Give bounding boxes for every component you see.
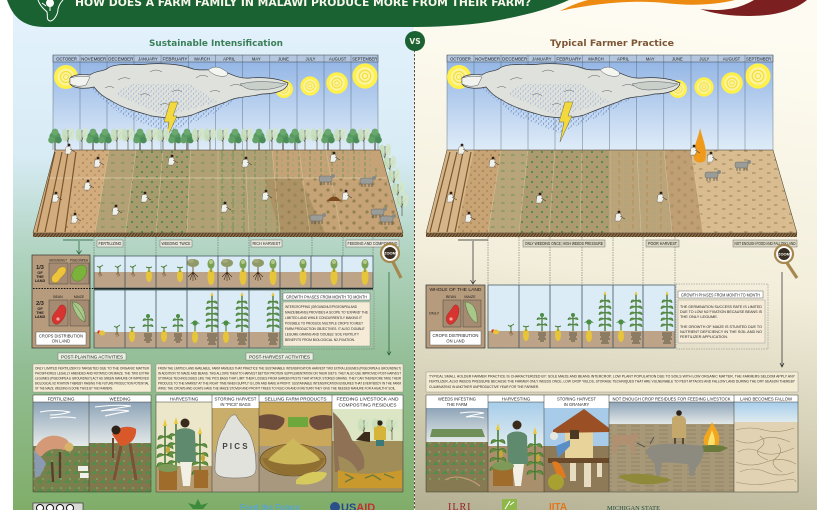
callout: growth phases sustainable: LIMITED LAND WHILE CONCURRENTLY MAKING IT <box>285 315 363 320</box>
callout: growth phases typical: NUTRIENT DEFICIENCY IN THE SOIL AND NO <box>680 329 762 334</box>
icon: zoom magnifier sustainable <box>381 244 401 278</box>
icon: bean <box>49 300 68 326</box>
arrow: zoom to activities sustainable <box>387 272 391 355</box>
panel: crop distribution sustainable <box>32 255 94 348</box>
callout: growth phases sustainable: GROWTH PHASES FROM MONTH TO MONTH <box>286 294 367 299</box>
panel: weeds infesting the farm: THE FARM <box>447 402 468 407</box>
land share labels: 2/3 <box>36 301 44 307</box>
panel: harvesting: HARVESTING <box>170 396 199 402</box>
leaf logo <box>188 499 208 509</box>
text block: post-planting: LEGUMES (PIGEONPEA & GROUNDNUT) ACT AS GREEN MANURE OF IMPROVED <box>35 376 149 380</box>
suns <box>447 63 771 98</box>
storm cloud <box>462 64 680 118</box>
panel: sustainable calendar sky <box>53 55 378 150</box>
plants <box>491 291 673 343</box>
text block: post-harvest: PRODUCE TO THE MARKET AT THE RIGHT TIME WHEN SUPPLY IS LOW AND MAKE A PROFIT. SUSTAINABLE INTENSIFICATION ENSURES THAT EVERYBODY IN THE FARM <box>158 380 401 386</box>
month labels: JUNE <box>278 57 289 62</box>
month labels: AUGUST <box>723 57 741 62</box>
month labels: DECEMBER <box>502 57 527 62</box>
text block: post-planting <box>33 364 151 392</box>
chart: growth phases typical <box>488 285 675 348</box>
panel: weeds infesting the farm: WEEDS INFESTING <box>438 396 476 402</box>
month labels: APRIL <box>223 57 236 62</box>
month labels <box>56 57 377 62</box>
callout: growth phases typical: GROWTH PHASES FROM MONTH TO MONTH <box>681 292 760 297</box>
crop labels: ONLY <box>429 310 440 316</box>
callout: growth phases typical: THE ONLY LEGUME. <box>680 314 718 319</box>
panel: weeding <box>89 395 151 492</box>
background: sustainable side <box>13 0 414 510</box>
bottom row plants <box>97 292 279 344</box>
panel: feeding livestock and composting: FEEDING LIVESTOCK AND <box>336 396 399 402</box>
text block: typical practice <box>426 372 798 392</box>
field: sustainable intensification <box>33 144 403 237</box>
footer logos: left <box>33 499 375 510</box>
icon: zoom magnifier typical <box>775 245 797 278</box>
icon: africa logo <box>38 0 63 21</box>
divider <box>414 50 416 510</box>
activity labels: sustainable: FEEDING AND COMPOSTING <box>348 241 398 246</box>
land share labels: 1/3 <box>36 265 44 271</box>
suns <box>54 63 378 98</box>
rain <box>482 80 642 133</box>
icon: pigeonpea <box>70 263 89 284</box>
month labels: MAY <box>252 57 261 62</box>
crop labels <box>49 258 89 299</box>
callout: growth phases typical: DUE TO LOW N2 FIXATION BECAUSE BEANS IS <box>680 309 762 314</box>
crop labels: GROUNDNUT <box>49 258 67 262</box>
text block: post-harvest: WINS: THE CROWS AND GOATS HAVE THE MAIZE STOVER AND PROFIT TREES TO FEED ON AND IN RETURN THEY GIVE THE NEEDED MANURE FOR A HEALTHY SOIL. <box>158 386 396 390</box>
panel: feeding livestock and composting: COMPOSTING RESIDUES <box>338 402 397 408</box>
field: typical farmer practice <box>426 128 797 237</box>
vs badge <box>405 31 425 51</box>
panel: not enough crop residues: NOT ENOUGH CROP RESIDUES FOR FEEDING LIVESTOCK <box>612 396 731 402</box>
crop labels: BEAN <box>446 295 456 299</box>
land share labels: OF <box>37 307 43 311</box>
activity labels: typical: NOT ENOUGH FOOD AND FALLOW LAND <box>734 241 796 246</box>
month labels: FEBRUARY <box>556 57 582 62</box>
panel: land becomes fallow: LAND BECOMES FALLOW <box>740 396 793 402</box>
land share labels: OF <box>37 271 43 275</box>
callout: growth phases sustainable <box>282 290 374 349</box>
label: post-planting activities <box>58 353 126 360</box>
text block: post-harvest <box>156 364 403 392</box>
arrow: zoom to activities typical <box>780 272 784 367</box>
land share labels <box>35 265 46 319</box>
panel: weeding: WEEDING <box>110 396 131 402</box>
callout: growth phases typical: FERTILIZER APPLICATION. <box>680 334 728 339</box>
month labels: JANUARY <box>138 57 158 62</box>
panel: weeds infesting the farm <box>426 395 488 492</box>
lightning <box>559 102 573 142</box>
icon: zoom magnifier typical: ZOOM <box>778 252 791 257</box>
month labels: MARCH <box>588 57 604 62</box>
activity labels: sustainable: FERTILIZING <box>98 241 122 246</box>
label: post-planting activities: POST-PLANTING ACTIVITIES <box>61 354 123 359</box>
month labels: JULY <box>306 57 316 62</box>
panel: feeding livestock and composting <box>332 395 403 492</box>
storm cloud <box>70 64 288 118</box>
text block: post-harvest: FROM THE LIMITED LAND AVAILABLE, FARM FAMILIES THAT PRACTICE THE SUSTAINABLE INTENSIFICATION HARVEST TWO EXTRA LEGUMES (PIGEONPEA & GROUNDNUT) <box>158 366 402 370</box>
footer logos: right <box>448 499 660 510</box>
month labels: MAY <box>646 57 655 62</box>
bonfire <box>694 128 706 162</box>
panel: fertilizing <box>33 395 89 492</box>
orange swoosh <box>560 0 735 11</box>
icon: zoom magnifier sustainable: ZOOM <box>384 251 397 256</box>
arrow: to crop distribution typical <box>458 240 488 284</box>
month labels: APRIL <box>617 57 630 62</box>
callout: growth phases sustainable: BENEFITS FROM BIOLOGICAL N2-FIXATION. <box>285 337 355 342</box>
month labels: DECEMBER <box>108 57 133 62</box>
heading: sustainable intensification: Sustainable Intensification <box>149 39 283 49</box>
panel: land becomes fallow <box>734 395 798 492</box>
panel: harvesting typical: HARVESTING <box>502 396 531 402</box>
cc license badge <box>33 503 83 510</box>
month labels: JANUARY <box>532 57 552 62</box>
crops distribution label: CROPS DISTRIBUTION <box>39 334 83 338</box>
tree row: sustainable <box>48 128 408 216</box>
crops distribution label: ON LAND <box>52 338 70 344</box>
month labels: OCTOBER <box>450 57 471 62</box>
activity labels: typical <box>488 237 797 285</box>
callout: growth phases sustainable: POSSIBLE TO PRODUCE MULTIPLE CROPS TO MEET <box>285 320 363 326</box>
text block: post-planting: PHOSPHORUS LEGALLY AMENDED AND ROTATED ON MAIZE. THE TWO EXTRA <box>35 370 149 376</box>
panel: selling farm products: SELLING FARM PRODUCTS <box>264 396 327 402</box>
label: post-harvest activities: POST-HARVEST ACTIVITIES <box>249 354 310 359</box>
land share labels: LAND <box>35 279 46 283</box>
crop distribution heading: WHOLE OF THE LAND <box>430 287 482 292</box>
panel: crop distribution typical <box>426 285 485 348</box>
icon: maize leaf <box>463 300 481 327</box>
panel: storing harvest in granary: STORING HARVEST <box>557 396 596 402</box>
crop labels: BEAN <box>53 295 63 299</box>
crops distribution label <box>430 331 481 345</box>
text block: post-planting: OF THE MAIZE. WEEDING IS DONE TWICE BY THE FARMERS. <box>35 386 113 390</box>
chart: growth phases sustainable <box>94 256 373 348</box>
month labels: SEPTEMBER <box>352 57 377 62</box>
icon: groundnut <box>49 263 68 284</box>
panel: typical calendar sky <box>447 55 773 150</box>
africa rising logo <box>502 499 517 510</box>
background: typical side <box>415 0 817 510</box>
crop labels: PIGEONPEA <box>70 258 89 262</box>
panel: not enough crop residues <box>609 395 734 492</box>
month labels: OCTOBER <box>56 57 77 62</box>
month labels: JULY <box>699 57 710 62</box>
crop labels: MAIZE <box>464 295 476 299</box>
panel: storing harvest in granary: IN GRANARY <box>564 402 589 407</box>
rain <box>90 80 250 133</box>
text block: typical practice: TYPICAL SMALL HOLDER FARMER PRACTICE IS CHARACTERIZED BY: SOLE MAIZE AND BEANS INTERCROP, LOW PLANT POPULATION DUE TO SOILS WITH LOW ORGANIC MATTER, THE FARMERS SELDOM APPLY ANY <box>429 374 795 378</box>
callout: growth phases sustainable: FARM PRODUCTION OBJECTIVES. IT ALSO 'DOUBLE' <box>285 326 365 331</box>
month labels: SEPTEMBER <box>746 57 771 62</box>
month labels: FEBRUARY <box>162 57 188 62</box>
icon: maize leaf <box>70 300 89 326</box>
crop labels <box>429 295 476 316</box>
vs badge: VS <box>409 37 421 46</box>
panel: harvesting typical <box>488 395 544 492</box>
text block: typical practice: CULMINATING IN ANOTHER UNPRODUCTIVE YEAR FOR THE FARMER. <box>429 384 539 389</box>
farmers and animals <box>447 144 751 222</box>
month labels: AUGUST <box>329 57 347 62</box>
land share labels: THE <box>36 311 44 315</box>
crops distribution label <box>36 332 86 345</box>
panel: fertilizing: FERTILIZING <box>48 396 75 402</box>
callout: growth phases sustainable: INTERCROPPING (GROUNDNUT/PIGEONPEA AND <box>285 304 357 309</box>
callout: growth phases typical: THE GROWTH OF MAIZE IS STUNTED DUE TO <box>680 324 762 329</box>
month labels <box>450 57 771 62</box>
panel: storing in pics bags: STORING HARVEST <box>214 396 257 402</box>
header banner <box>7 0 807 27</box>
heading: typical farmer practice: Typical Farmer Practice <box>550 39 674 49</box>
activity labels: sustainable <box>94 237 399 256</box>
callout: growth phases sustainable: LEGUME GRAINS AND 'DOUBLE' SOIL FERTILITY <box>285 332 359 336</box>
month labels: MARCH <box>194 57 210 62</box>
text block: post-harvest: STORAGE TECHNOLOGIES LIKE THE PICS BAGS THAT LIMIT THEIR LOSSES FROM GARDEN PESTS THAT ATTACK STORED GRAINS. THEY CAN THEREFORE TAKE THEIR <box>158 376 401 380</box>
crops distribution label: CROPS DISTRIBUTION <box>432 333 479 338</box>
maroon swoosh <box>700 0 807 16</box>
callout: growth phases typical <box>676 284 768 349</box>
month labels: NOVEMBER <box>475 57 500 62</box>
panel: storing in pics bags: IN "PICS" BAGS <box>220 402 251 407</box>
month labels: NOVEMBER <box>81 57 106 62</box>
text block: post-planting: ONLY LIMITED FERTILIZER IS TARGETED DUE TO THE ORGANIC MATTER <box>35 366 149 370</box>
label: post-harvest activities <box>246 353 313 360</box>
activity labels: typical: POOR HARVEST <box>648 241 677 246</box>
panel: storing in pics bags: P I C S <box>222 442 248 451</box>
crops distribution label: ON LAND <box>446 338 465 344</box>
panel: harvesting <box>156 395 212 492</box>
text block: post-planting: BIOLOGICAL N2 FIXATION THEREBY RAISING THE FUTURE PRODUCTION POTENTIAL <box>35 380 150 386</box>
activity labels: sustainable: RICH HARVEST <box>252 241 281 246</box>
farmers and animals <box>52 144 396 225</box>
arrow: to crop distribution <box>63 240 93 254</box>
lightning <box>164 102 178 140</box>
text block: post-harvest: IN ADDITION TO MAIZE AND BEANS. THIS ALLOWS THEM TO HARVEST BETTER PROTEIN SUPPLEMENTATION ON THEIR DIETS. THEY ALSO USE IMPROVED POST-HARVEST <box>158 370 401 376</box>
activity labels: typical: ONLY WEEDING ONCE; HIGH WEEDS PRESSURE <box>525 241 603 246</box>
panel: storing in pics bags <box>212 395 259 492</box>
land share labels: LAND <box>35 315 46 319</box>
month labels: JUNE <box>672 57 683 62</box>
callout: growth phases sustainable: MAIZE/BEANS) PROVIDES A SCOPE TO 'EXPAND' THE <box>285 310 368 314</box>
top row plants <box>97 259 368 285</box>
panel: storing harvest in granary <box>544 395 609 492</box>
callout: growth phases typical: THE GERMINATION SUCCESS RATE IS LIMITED <box>680 304 762 309</box>
icon: bean <box>443 300 461 327</box>
activity labels: sustainable: WEEDING TWICE <box>162 241 191 246</box>
panel: selling farm products <box>259 395 332 492</box>
crop labels: MAIZE <box>74 295 85 299</box>
land share labels: THE <box>36 275 44 279</box>
